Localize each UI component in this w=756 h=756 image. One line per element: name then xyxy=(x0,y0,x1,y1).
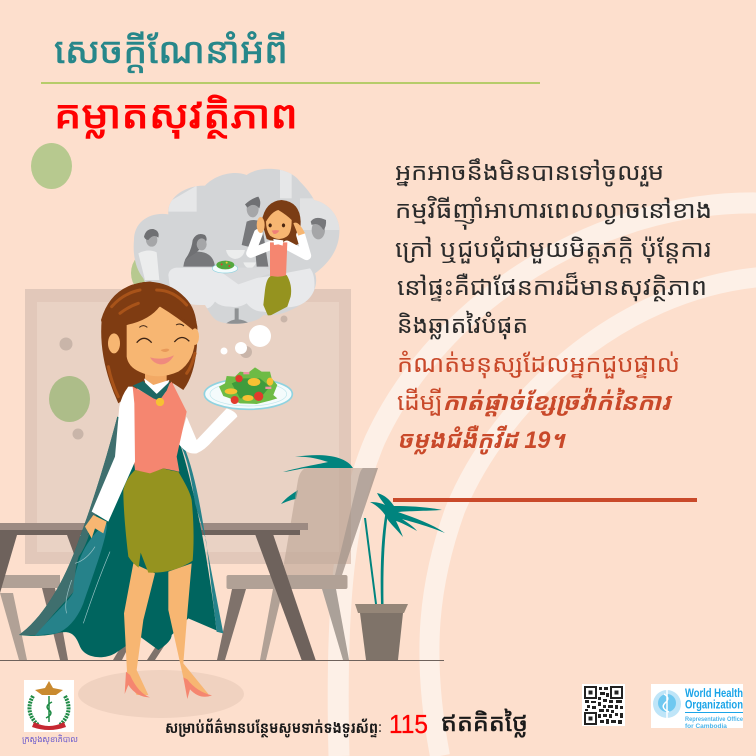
table front edge over chair xyxy=(210,523,308,535)
call to action text: កំណត់មនុស្សដែលអ្នកជួបផ្ទាល់ xyxy=(397,350,680,379)
body text: អ្នកអាចនឹងមិនបានទៅចូលរួម xyxy=(395,158,664,188)
left chair xyxy=(0,575,168,660)
shoes xyxy=(125,672,212,699)
plant xyxy=(281,455,445,660)
ears xyxy=(108,328,199,353)
title line 2: គម្លាតសុវត្ថិភាព xyxy=(54,95,298,139)
wall dots xyxy=(49,316,288,440)
emblem wreath xyxy=(29,696,69,725)
cape xyxy=(19,417,223,657)
standing server xyxy=(226,197,268,268)
QR code xyxy=(582,684,625,726)
left diner xyxy=(138,229,159,280)
neck xyxy=(145,368,167,388)
skirt xyxy=(123,468,194,573)
emblem banner xyxy=(32,722,66,730)
title xyxy=(41,30,540,139)
main woman with cape xyxy=(19,282,292,699)
miniature salad plate xyxy=(212,261,238,273)
table base xyxy=(226,308,248,324)
body text: និងឆ្លាតវៃបំផុត xyxy=(397,310,528,340)
call to action text: ចម្លងជំងឺកូវីដ 19។ xyxy=(397,424,566,456)
WHO office: Representative Office xyxy=(685,716,743,723)
hair top xyxy=(101,282,197,330)
title divider xyxy=(41,82,540,84)
left arm xyxy=(92,387,135,522)
ministry name: ក្រសួងសុខាភិបាល xyxy=(22,734,78,745)
call to action text: ដើម្បីកាត់ផ្តាច់ខ្សែច្រវ៉ាក់នៃការ xyxy=(397,387,672,417)
thought bubble xyxy=(130,165,347,328)
hotline text: 115 xyxy=(389,709,428,739)
body text xyxy=(395,158,712,340)
vest xyxy=(131,382,187,473)
wall panel xyxy=(25,289,351,564)
left hand xyxy=(85,515,107,538)
right chair xyxy=(217,468,378,661)
legs xyxy=(124,563,208,695)
title line 1: សេចក្តីណែនាំអំពី xyxy=(54,30,288,73)
thought bubbles white xyxy=(220,325,271,354)
floor shadow xyxy=(78,670,244,718)
face xyxy=(127,307,195,376)
logo: ministry of health xyxy=(22,680,78,745)
middle diner xyxy=(183,234,215,267)
body text: ក្រៅ ឬជួបជុំជាមួយមិត្តភក្តិ ប៉ុន្តែការ xyxy=(395,235,711,264)
background wall patches xyxy=(168,167,342,230)
right diner xyxy=(311,218,326,239)
green circle top left xyxy=(31,143,72,189)
tablecloth xyxy=(168,268,314,312)
hotline text xyxy=(165,708,528,739)
collar xyxy=(133,378,171,406)
hotline text: ឥតគិតថ្លៃ xyxy=(441,708,528,738)
green circle behind thought cloud xyxy=(131,250,173,296)
worried woman xyxy=(251,200,307,317)
floor line xyxy=(0,660,444,661)
table xyxy=(0,523,308,593)
facial features xyxy=(137,324,189,364)
WHO emblem xyxy=(653,686,681,719)
emblem crown xyxy=(35,681,63,695)
hair highlights xyxy=(108,290,195,397)
accent rule xyxy=(393,498,697,502)
body text: នៅផ្ទះគឺជាផែនការដ៏មានសុវត្ថិភាព xyxy=(397,272,707,302)
body text: កម្មវិធីញ៉ាំអាហារពេលល្ងាចនៅខាង xyxy=(395,195,712,230)
right arm holding plate xyxy=(178,408,237,454)
hair back xyxy=(101,282,197,403)
hotline text: សម្រាប់ព័ត៌មានបន្ថែមសូមទាក់ទងទូរស័ព្ទៈ xyxy=(165,716,382,738)
emblem snake xyxy=(46,696,52,722)
WHO logo: for Cambodia xyxy=(685,723,727,730)
WHO logo xyxy=(651,684,743,730)
call to action text xyxy=(397,350,680,456)
salad plate xyxy=(204,367,292,409)
